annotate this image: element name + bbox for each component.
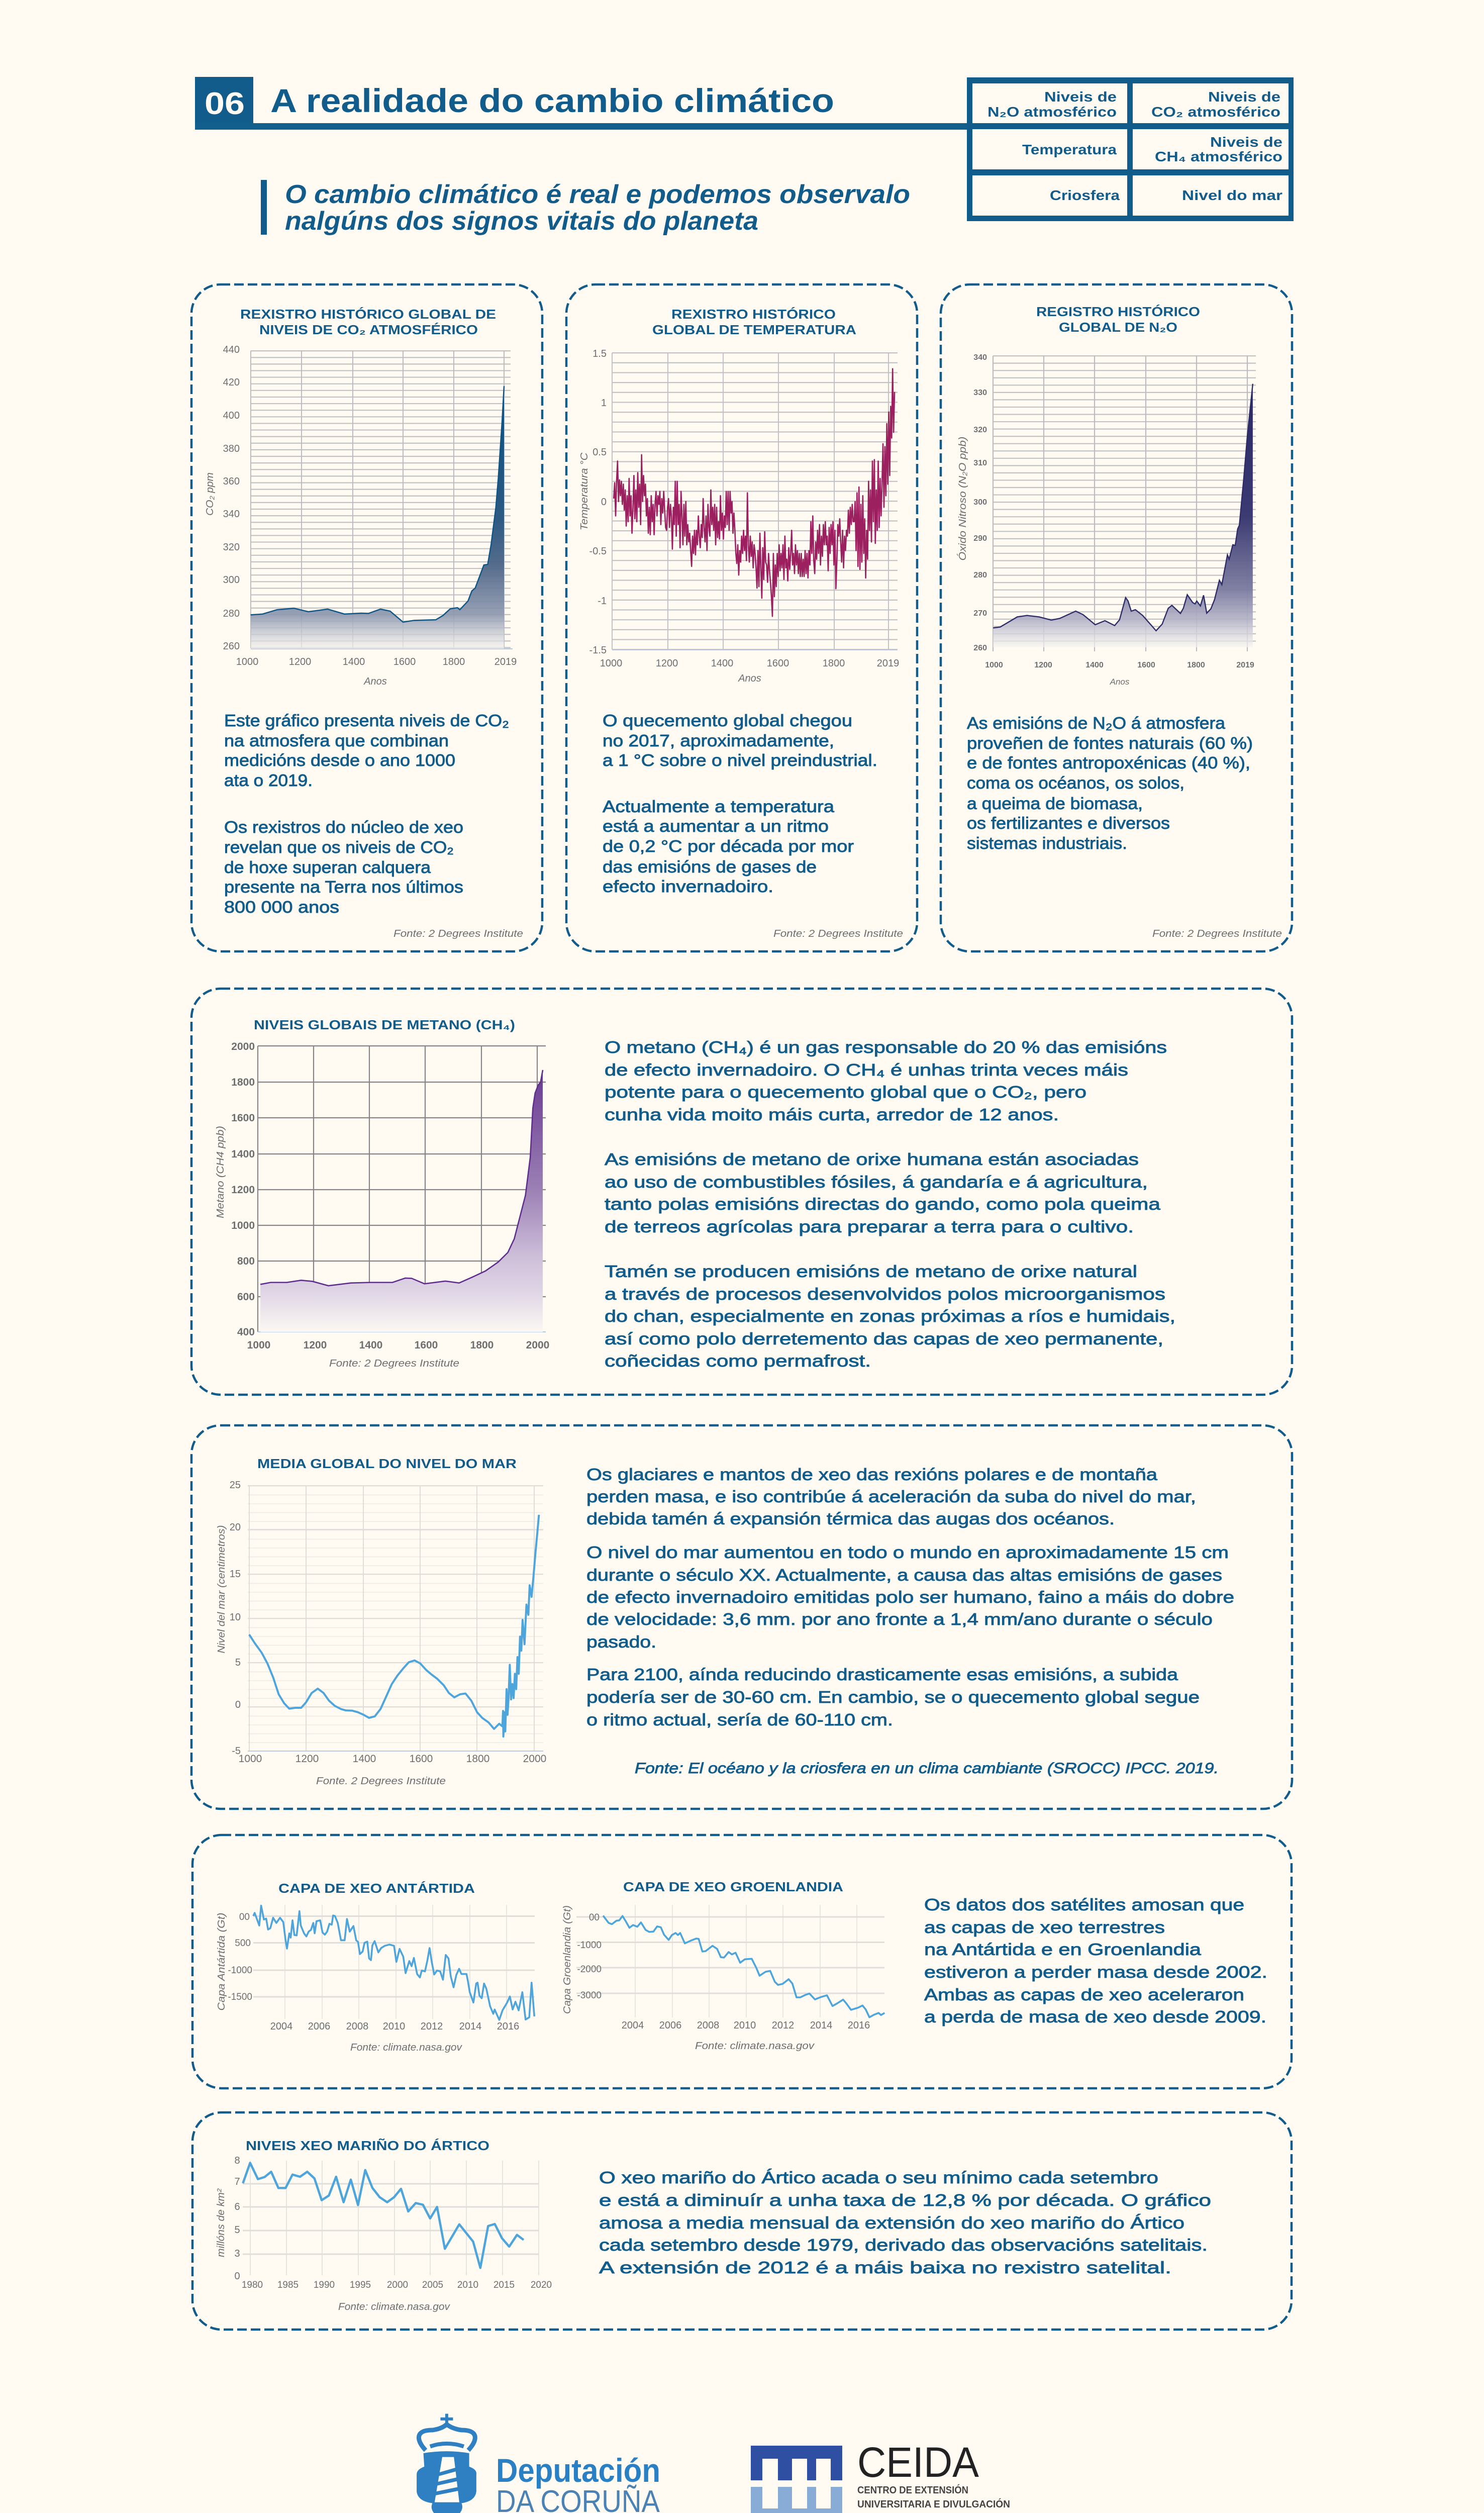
- heading: [240, 307, 496, 337]
- navigation table: Niveis de: [1208, 89, 1280, 105]
- chart: N2O: 1600: [1137, 661, 1155, 669]
- chart: Antarctica: 2004: [270, 2021, 292, 2032]
- chart: CO2: 1800: [443, 656, 465, 667]
- description: medicións desde o ano 1000: [224, 751, 455, 769]
- chart: methane: 2000: [526, 1339, 549, 1351]
- chart: sea level: 5: [235, 1657, 241, 1668]
- chart: arctic sea ice: 1980: [242, 2280, 263, 2290]
- description: estiveron a perder masa desde 2002.: [924, 1963, 1267, 1981]
- description: do chan, especialmente en zonas próximas a ríos e humidais,: [605, 1307, 1175, 1325]
- description: O metano (CH₄) é un gas responsable do 20 % das emisións: [605, 1038, 1167, 1056]
- logo: CEIDA: CENTRO DE EXTENSIÓN: [857, 2484, 968, 2496]
- panel border: [192, 1835, 1292, 2088]
- chart: methane: 400: [237, 1326, 255, 1338]
- description: ata o 2019.: [224, 771, 313, 790]
- navigation table: Nivel do mar: [1182, 187, 1282, 203]
- navigation table: Criosfera: [1050, 187, 1120, 203]
- chart: Antarctica: 2008: [346, 2021, 368, 2032]
- description: O xeo mariño do Ártico acada o seu mínimo cada setembro: [599, 2168, 1158, 2187]
- chart: methane: 1400: [359, 1339, 382, 1351]
- description: pasado.: [586, 1632, 656, 1651]
- chart: N2O: 2019: [1236, 661, 1254, 669]
- chart: methane: 1200: [304, 1339, 327, 1351]
- chart: CO2: [205, 344, 517, 687]
- chart: methane: 800: [237, 1255, 255, 1267]
- chart: Greenland: -1000: [577, 1940, 602, 1951]
- description: [599, 2168, 1211, 2277]
- panel: CO2: [191, 284, 542, 951]
- chart: CO2: 2019: [494, 656, 517, 667]
- description: a perda de masa de xeo desde 2009.: [924, 2007, 1266, 2026]
- description: na atmosfera que combinan: [224, 731, 449, 750]
- chart: arctic sea ice: 1990: [314, 2280, 335, 2290]
- chart: sea level: 1600: [410, 1753, 433, 1765]
- chart: methane: 1600: [415, 1339, 438, 1351]
- chart: arctic sea ice: 2015: [493, 2280, 515, 2290]
- heading: REXISTRO HISTÓRICO GLOBAL DE: [240, 307, 496, 322]
- chart: CO2: 300: [223, 574, 240, 586]
- chart: N2O: 300: [973, 498, 987, 507]
- chart: arctic sea ice: millóns de km²: [216, 2188, 227, 2257]
- chart: CO2: 1000: [236, 656, 258, 667]
- chart: methane: 1800: [470, 1339, 493, 1351]
- section number box: 06: [205, 86, 245, 121]
- chart: arctic sea ice: 3: [234, 2248, 240, 2259]
- chart: temperature: 0.5: [592, 447, 607, 458]
- logo: Deputación da Coruña: Deputación: [496, 2452, 660, 2489]
- chart: sea level: Nivel del mar (centimetros): [216, 1525, 227, 1654]
- chart: Antarctica: 2006: [308, 2021, 330, 2032]
- chart: CO2: 320: [223, 542, 240, 553]
- heading: REXISTRO HISTÓRICO: [671, 307, 836, 322]
- chart: Greenland: 2006: [659, 2020, 681, 2031]
- navigation table: N₂O atmosférico: [987, 104, 1117, 120]
- chart: methane: Metano (CH4 ppb): [215, 1126, 226, 1218]
- heading: NIVEIS GLOBAIS DE METANO (CH₄): [254, 1017, 515, 1032]
- description: O quecemento global chegou: [603, 711, 852, 730]
- navigation table: Niveis de: [1210, 134, 1282, 150]
- chart: temperature: 1.5: [592, 348, 607, 359]
- chart: CO2: 1200: [289, 656, 311, 667]
- panel: arctic sea ice: [192, 2112, 1292, 2330]
- chart: sea level: 1000: [239, 1753, 262, 1765]
- chart: N2O: 330: [973, 389, 987, 397]
- description: Tamén se producen emisións de metano de orixe natural: [605, 1262, 1137, 1281]
- chart: N2O: 260: [973, 644, 987, 652]
- icon: CEIDA mark: [751, 2446, 842, 2513]
- logo: CEIDA: [751, 2439, 1010, 2513]
- chart: temperature: Anos: [738, 673, 761, 684]
- chart: Greenland: 00: [589, 1912, 600, 1923]
- chart: Greenland: 2008: [697, 2020, 719, 2031]
- chart: arctic sea ice: 2020: [531, 2280, 552, 2290]
- chart: arctic sea ice: 6: [234, 2201, 240, 2212]
- heading: MEDIA GLOBAL DO NIVEL DO MAR: [257, 1456, 517, 1471]
- chart: Greenland: 2014: [810, 2020, 832, 2031]
- chart: temperature: 2019: [877, 658, 899, 669]
- description: debida tamén á expansión térmica das augas dos océanos.: [586, 1509, 1115, 1528]
- panel border: [941, 284, 1292, 951]
- description: de velocidade: 3,6 mm. por ano fronte a 1,4 mm/ano durante o século: [586, 1610, 1213, 1628]
- chart: Greenland: Fonte: climate.nasa.gov: [695, 2041, 815, 2052]
- chart: sea level: 1800: [466, 1753, 489, 1765]
- chart: Greenland: 2012: [772, 2020, 794, 2031]
- description: sistemas industriais.: [967, 834, 1127, 852]
- logo: CEIDA: UNIVERSITARIA E DIVULGACIÓN: [857, 2498, 1010, 2510]
- description: Ambas as capas de xeo aceleraron: [924, 1985, 1244, 2004]
- chart: sea level: 0: [235, 1699, 241, 1710]
- subtitle: nalgúns dos signos vitais do planeta: [285, 207, 758, 236]
- chart: Antarctica: -1500: [228, 1992, 252, 2002]
- source: Fonte: El océano y la criosfera en un clima cambiante (SROCC) IPCC. 2019.: [635, 1760, 1219, 1777]
- chart: methane: [215, 1041, 549, 1369]
- heading: NIVEIS XEO MARIÑO DO ÁRTICO: [246, 2138, 489, 2153]
- chart: Antarctica: -1000: [228, 1965, 252, 1976]
- navigation table: Temperatura: [1022, 142, 1117, 157]
- chart: temperature: -1: [598, 596, 607, 607]
- chart: temperature: 1800: [823, 658, 845, 669]
- chart: temperature: -1.5: [589, 645, 607, 656]
- chart: sea level: 15: [230, 1569, 241, 1580]
- description: ao uso de combustibles fósiles, á gandaría e á agricultura,: [605, 1173, 1148, 1191]
- description: a 1 °C sobre o nivel preindustrial.: [603, 751, 877, 769]
- description: cada setembro desde 1979, derivado das observacións satelitais.: [599, 2236, 1208, 2254]
- chart: sea level: [216, 1480, 546, 1787]
- chart: N2O: Anos: [1110, 677, 1130, 687]
- logo: Deputación da Coruña: [417, 2414, 660, 2513]
- description: revelan que os niveis de CO₂: [224, 838, 454, 856]
- chart: Antarctica: 00: [239, 1912, 250, 1922]
- chart: Antarctica: 2012: [421, 2021, 443, 2032]
- chart: CO2: 1600: [393, 656, 416, 667]
- chart: CO2: 340: [223, 509, 240, 520]
- chart: CO2: 360: [223, 476, 240, 487]
- chart: sea level: 1200: [295, 1753, 319, 1765]
- chart: sea level: 20: [230, 1522, 241, 1533]
- panel: temperature: [566, 284, 917, 951]
- description: Este gráfico presenta niveis de CO₂: [224, 711, 509, 730]
- heading: [652, 307, 856, 337]
- description: [967, 714, 1253, 852]
- chart: methane: 600: [237, 1291, 255, 1303]
- description: de efecto invernadoiro emitidas polo ser humano, faino a máis do dobre: [586, 1588, 1234, 1606]
- chart: arctic sea ice: [216, 2155, 552, 2312]
- chart: Greenland: -2000: [577, 1964, 602, 1975]
- navigation table: CO₂ atmosférico: [1151, 104, 1280, 120]
- chart: N2O: Óxido Nitroso (N₂O ppb): [957, 436, 968, 561]
- chart: CO2: 280: [223, 608, 240, 619]
- navigation table: CH₄ atmosférico: [1155, 149, 1282, 164]
- chart: methane: 1200: [231, 1184, 255, 1196]
- panel border: [191, 1425, 1292, 1809]
- description: Actualmente a temperatura: [603, 797, 835, 816]
- chart: arctic sea ice: 0: [234, 2271, 240, 2282]
- description: coma os océanos, os solos,: [967, 774, 1184, 792]
- description: cunha vida moito máis curta, arredor de 12 anos.: [605, 1105, 1059, 1124]
- chart: arctic sea ice: 5: [234, 2225, 240, 2236]
- chart: methane: 1400: [231, 1148, 255, 1160]
- chart: arctic sea ice: 7: [234, 2176, 240, 2187]
- panel border: [191, 284, 542, 951]
- chart: arctic sea ice: 1995: [350, 2280, 371, 2290]
- chart: sea level: Fonte. 2 Degrees Institute: [316, 1776, 446, 1787]
- chart: Antarctica: [216, 1881, 535, 2053]
- description: no 2017, aproximadamente,: [603, 731, 834, 750]
- description: a través de procesos desenvolvidos polos microorganismos: [605, 1285, 1165, 1303]
- chart: sea level: 10: [230, 1612, 241, 1623]
- description: As emisións de N₂O á atmosfera: [967, 714, 1226, 732]
- header: [195, 77, 1294, 236]
- chart: Antarctica: 2014: [459, 2021, 481, 2032]
- chart: Antarctica: Capa Antártida (Gt): [216, 1913, 227, 2010]
- description: coñecidas como permafrost.: [605, 1351, 871, 1370]
- description: A extensión de 2012 é a máis baixa no rexistro satelital.: [599, 2258, 1171, 2277]
- chart: arctic sea ice: 1985: [277, 2280, 299, 2290]
- heading: REGISTRO HISTÓRICO: [1036, 304, 1200, 319]
- description: así como polo derretemento das capas de xeo permanente,: [605, 1329, 1163, 1348]
- description: os fertilizantes e diversos: [967, 814, 1170, 832]
- chart: methane: 1000: [247, 1339, 270, 1351]
- description: e está a diminuír a unha taxa de 12,8 % por década. O gráfico: [599, 2191, 1211, 2209]
- panel border: [566, 284, 917, 951]
- chart: CO2: 1400: [343, 656, 365, 667]
- description: as capas de xeo terrestres: [924, 1918, 1165, 1937]
- navigation table: [967, 77, 1294, 221]
- description: Para 2100, aínda reducindo drasticamente esas emisións, a subida: [586, 1665, 1178, 1684]
- chart: arctic sea ice: Fonte: climate.nasa.gov: [338, 2301, 450, 2312]
- description: O nivel do mar aumentou en todo o mundo en aproximadamente 15 cm: [586, 1543, 1229, 1562]
- chart: arctic sea ice: 2000: [387, 2280, 408, 2290]
- description: tanto polas emisións directas do gando, como pola queima: [605, 1195, 1161, 1213]
- chart: arctic sea ice: 2010: [457, 2280, 478, 2290]
- chart: N2O: 1200: [1034, 661, 1052, 669]
- chart: Greenland: -3000: [577, 1990, 602, 2001]
- chart: methane: 1000: [231, 1220, 255, 1231]
- panel: N2O: [941, 284, 1292, 951]
- source: Fonte: 2 Degrees Institute: [1152, 928, 1282, 939]
- description: [924, 1895, 1267, 2026]
- description: [603, 711, 877, 896]
- heading: CAPA DE XEO ANTÁRTIDA: [278, 1881, 475, 1896]
- source: Fonte: 2 Degrees Institute: [773, 928, 903, 939]
- chart: CO2: Anos: [363, 676, 387, 687]
- description: 800 000 anos: [224, 898, 339, 916]
- description: Os glaciares e mantos de xeo das rexións polares e de montaña: [586, 1465, 1158, 1484]
- source: Fonte: 2 Degrees Institute: [393, 928, 523, 939]
- chart: methane: 1600: [231, 1112, 255, 1124]
- chart: N2O: 1400: [1085, 661, 1104, 669]
- chart: N2O: 310: [973, 459, 987, 467]
- description: das emisións de gases de: [603, 857, 817, 876]
- chart: Greenland: 2010: [734, 2020, 756, 2031]
- description: [605, 1038, 1175, 1370]
- chart: sea level: 25: [230, 1480, 241, 1491]
- chart: Greenland: 2016: [848, 2020, 870, 2031]
- title: A realidade do cambio climático: [270, 82, 834, 119]
- chart: sea level: 2000: [523, 1753, 546, 1765]
- chart: N2O: [957, 353, 1254, 687]
- heading: [1036, 304, 1200, 335]
- chart: temperature: 1600: [767, 658, 789, 669]
- description: presente na Terra nos últimos: [224, 878, 463, 896]
- chart: methane: 2000: [231, 1041, 255, 1052]
- chart: CO2: 400: [223, 410, 240, 421]
- description: de terreos agrícolas para preparar a terra para o cultivo.: [605, 1217, 1134, 1236]
- description: a queima de biomasa,: [967, 794, 1143, 813]
- chart: N2O: 270: [973, 609, 987, 618]
- chart: CO2: 260: [223, 641, 240, 652]
- chart: Antarctica: 2010: [383, 2021, 405, 2032]
- chart: Greenland: 2004: [622, 2020, 644, 2031]
- heading: GLOBAL DE TEMPERATURA: [652, 322, 856, 337]
- description: efecto invernadoiro.: [603, 877, 773, 896]
- description: de hoxe superan calquera: [224, 858, 431, 877]
- description: podería ser de 30-60 cm. En cambio, se o quecemento global segue: [586, 1688, 1200, 1706]
- chart: N2O: 340: [973, 353, 987, 362]
- header rule: [195, 123, 969, 130]
- chart: methane: Fonte: 2 Degrees Institute: [329, 1358, 459, 1369]
- description: na Antártida e en Groenlandia: [924, 1940, 1202, 1959]
- chart: sea level: 1400: [353, 1753, 376, 1765]
- description: de 0,2 °C por década por mor: [603, 837, 854, 855]
- chart: temperature: 1000: [600, 658, 622, 669]
- description: está a aumentar a un ritmo: [603, 817, 829, 835]
- chart: arctic sea ice: 2005: [422, 2280, 443, 2290]
- subtitle: [261, 180, 910, 236]
- description: e de fontes antropoxénicas (40 %),: [967, 753, 1250, 772]
- chart: temperature: 0: [601, 497, 607, 508]
- chart: Greenland: Capa Groenlandia (Gt): [562, 1905, 573, 2014]
- chart: N2O: 1800: [1187, 661, 1205, 669]
- description: perden masa, e iso contribúe á aceleración da suba do nivel do mar,: [586, 1487, 1196, 1506]
- description: Os rexistros do núcleo de xeo: [224, 818, 463, 836]
- description: o ritmo actual, sería de 60-110 cm.: [586, 1710, 893, 1729]
- chart: arctic sea ice: 8: [234, 2155, 240, 2166]
- chart: temperature: 1200: [656, 658, 678, 669]
- description: As emisións de metano de orixe humana están asociadas: [605, 1150, 1139, 1169]
- section number box: [195, 77, 253, 130]
- chart: N2O: 1000: [985, 661, 1003, 669]
- chart: CO2: 380: [223, 443, 240, 454]
- chart: Antarctica: 500: [235, 1938, 251, 1949]
- chart: temperature: [579, 348, 899, 684]
- chart: CO2: 440: [223, 344, 240, 355]
- heading: CAPA DE XEO GROENLANDIA: [623, 1879, 843, 1894]
- logo: CEIDA: CEIDA: [857, 2439, 979, 2486]
- chart: Antarctica: Fonte: climate.nasa.gov: [350, 2042, 462, 2053]
- chart: temperature: 1400: [711, 658, 733, 669]
- chart: N2O: 280: [973, 571, 987, 579]
- chart: CO2: CO₂ ppm: [205, 472, 216, 516]
- chart: N2O: 290: [973, 534, 987, 543]
- description: potente para o quecemento global que o CO₂, pero: [605, 1083, 1086, 1101]
- chart: Antarctica: 2016: [497, 2021, 519, 2032]
- chart: Greenland: [562, 1879, 884, 2052]
- panel border: [192, 2112, 1292, 2330]
- description: durante o século XX. Actualmente, a causa das altas emisións de gases: [586, 1566, 1222, 1584]
- navigation table: Niveis de: [1044, 89, 1117, 105]
- panel: methane: [191, 989, 1292, 1395]
- heading: NIVEIS DE CO₂ ATMOSFÉRICO: [259, 322, 478, 337]
- chart: sea level: -5: [232, 1746, 241, 1757]
- description: proveñen de fontes naturais (60 %): [967, 734, 1253, 752]
- chart: temperature: Temperatura °C: [579, 452, 590, 531]
- chart: CO2: 420: [223, 377, 240, 388]
- chart: methane: 1800: [231, 1077, 255, 1088]
- description: Os datos dos satélites amosan que: [924, 1895, 1244, 1914]
- subtitle: O cambio climático é real e podemos observalo: [285, 180, 910, 209]
- chart: temperature: 1: [601, 398, 607, 409]
- panel: sea level: [191, 1425, 1292, 1809]
- heading: GLOBAL DE N₂O: [1059, 320, 1177, 335]
- description: amosa a media mensual da extensión do xeo mariño do Ártico: [599, 2213, 1184, 2232]
- chart: N2O: 320: [973, 426, 987, 434]
- chart: temperature: -0.5: [589, 546, 607, 557]
- description: de efecto invernadoiro. O CH₄ é unhas trinta veces máis: [605, 1060, 1128, 1079]
- panel: ice sheets: [192, 1835, 1292, 2088]
- description: [586, 1465, 1234, 1729]
- panel border: [191, 989, 1292, 1395]
- icon: crest: [417, 2414, 476, 2513]
- description: [224, 711, 509, 916]
